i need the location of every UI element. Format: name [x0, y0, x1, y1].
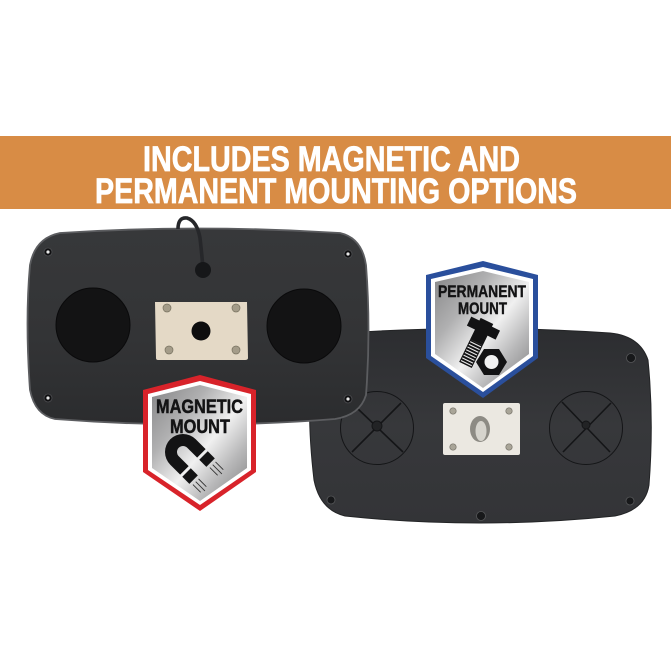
orange banner [0, 136, 671, 211]
banner heading: PERMANENT MOUNTING OPTIONS [95, 172, 577, 211]
badge label: MOUNT [458, 299, 507, 318]
badge label [438, 282, 527, 318]
banner heading [95, 140, 577, 211]
screws [327, 354, 636, 520]
badge: magnetic mount [143, 375, 256, 511]
centre plate [155, 302, 248, 360]
right knockout circle [550, 392, 622, 464]
badge label: PERMANENT [438, 282, 527, 301]
right magnet [267, 289, 341, 363]
mounting plate with bolt [443, 403, 520, 455]
left housing: magnetic mount back [28, 218, 368, 424]
badge label: MOUNT [170, 416, 230, 438]
screws [44, 248, 352, 403]
left magnet [56, 288, 130, 362]
left knockout circle [340, 392, 414, 464]
hanging cable [178, 218, 203, 268]
badge label: MAGNETIC [156, 396, 243, 418]
icon: horseshoe magnet [158, 427, 226, 495]
icon: nut [476, 349, 507, 375]
right housing: permanent mount back [310, 328, 651, 523]
badge label [156, 396, 243, 438]
banner heading: INCLUDES MAGNETIC AND [143, 140, 520, 179]
cable grommet [195, 262, 211, 278]
badge: permanent mount [426, 261, 538, 398]
icon: bolt [451, 314, 501, 372]
